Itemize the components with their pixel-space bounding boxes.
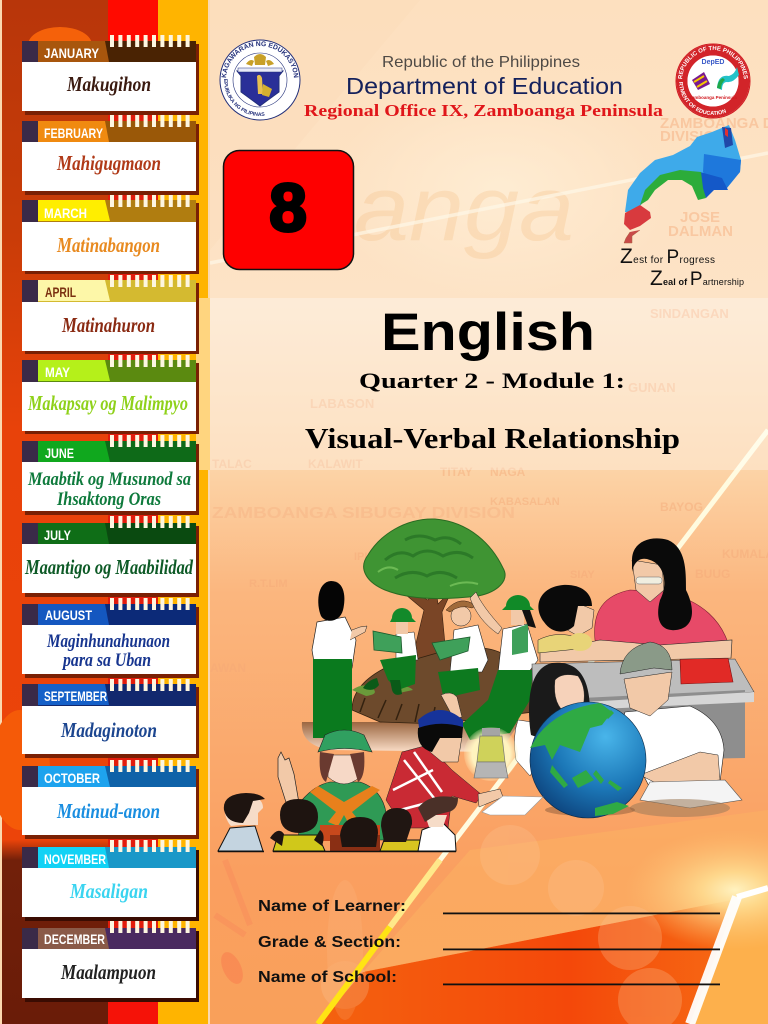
calendar card: April: Matinahuron <box>61 313 155 337</box>
slogan: Zeal of Partnership: Zeal of Partnership <box>650 267 744 290</box>
icon: regional seal: DepED <box>702 59 724 66</box>
calendar card: August <box>22 598 199 678</box>
heading: Regional Office: Regional Office IX, Zamboanga Peninsula <box>304 101 663 120</box>
subtitle: lesson title: Visual-Verbal Relationship <box>305 424 680 455</box>
calendar card: April: APRIL <box>45 284 76 300</box>
calendar card: September: Madaginoton <box>60 718 157 742</box>
faint map labels <box>210 115 768 675</box>
calendar card: August: para sa Uban <box>61 650 151 671</box>
grade badge: 8 <box>269 170 307 246</box>
calendar card: February: FEBRUARY <box>44 125 104 141</box>
diagonal streak <box>440 430 768 860</box>
faint decorative faces <box>321 825 682 1024</box>
scout girl <box>278 730 387 841</box>
calendar card: August: AUGUST <box>45 607 92 623</box>
calendar card: November: NOVEMBER <box>44 851 106 867</box>
faint map labels: SIAY <box>570 569 595 581</box>
calendar card: December <box>22 921 199 1002</box>
faint map labels: KALAWIT <box>308 457 363 471</box>
faint map labels: TITAY <box>440 465 473 479</box>
boy in red shirt <box>386 710 503 828</box>
calendar card: October: OCTOBER <box>44 770 100 786</box>
calendar sidebar background <box>0 0 210 1024</box>
faint map labels: SINDANGAN <box>650 306 729 321</box>
icon: regional seal: REPUBLIC OF THE PHILIPPINES <box>678 46 748 79</box>
faint map labels: IPIL <box>354 551 374 563</box>
grade badge <box>224 150 354 270</box>
faint map labels: BUUG <box>695 567 730 581</box>
calendar card: March: Matinabangon <box>56 233 160 257</box>
icon: DepEd seal: KAGAWARAN NG EDUKASYON <box>221 41 299 78</box>
calendar card: November: Masaligan <box>69 879 148 903</box>
illustration: students and teachers <box>218 519 754 852</box>
field: name of learner: Name of Learner: <box>258 898 406 915</box>
faint map labels: NAGA <box>490 465 526 479</box>
calendar card: December: DECEMBER <box>44 931 105 947</box>
paper <box>482 796 543 815</box>
faint map labels: LABASON <box>310 396 374 411</box>
faint map labels: AWAN <box>210 661 246 675</box>
faint map labels: DALMAN <box>668 223 733 240</box>
rock and ground <box>302 648 535 752</box>
calendar card: May: MAY <box>45 364 71 380</box>
calendar card: July: Maantigo og Maabilidad <box>24 555 193 579</box>
icon: DepEd seal <box>220 40 300 120</box>
teacher <box>540 538 732 662</box>
faint map labels: ZAMBOANGA SIBUGAY DIVISION <box>212 505 515 522</box>
desk <box>532 658 754 762</box>
calendar card: May <box>22 355 199 434</box>
boy at desk <box>538 585 594 653</box>
girl behind globe <box>514 663 590 776</box>
calendar card: March <box>22 195 199 274</box>
faint map labels: DIVISION <box>660 128 726 145</box>
faint map labels: GUNAN <box>628 380 676 395</box>
reading student green cap <box>363 608 418 695</box>
student arm raised <box>462 592 538 740</box>
calendar card: February <box>22 115 199 195</box>
map of Zamboanga Peninsula <box>624 125 741 243</box>
calendar card: May: Makapsay og Malimpyo <box>27 391 188 415</box>
calendar card: January: Makugihon <box>66 72 151 96</box>
calendar card: April <box>22 275 199 354</box>
front row of children <box>218 793 458 852</box>
calendar card: December: Maalampuon <box>60 960 156 984</box>
calendar card: January: JANUARY <box>44 45 100 61</box>
icon: regional seal <box>676 44 750 118</box>
field: name of school: Name of School: <box>258 969 397 986</box>
faint map labels: R.T.LIM <box>249 578 288 590</box>
calendar card: November <box>22 840 199 921</box>
faint map labels: BAYOG <box>660 500 703 514</box>
calendar card: June: Maabtik og Musunod sa <box>27 469 191 490</box>
reading student with hat <box>432 601 488 719</box>
faint map labels: TALAC <box>212 457 252 471</box>
calendar card: June: Ihsaktong Oras <box>56 489 161 510</box>
calendar card: October <box>22 760 199 839</box>
heading: Republic of the Philippines: Republic of the Philippines <box>382 54 580 71</box>
faint map labels: KABASALAN <box>490 496 560 508</box>
translucent title band <box>196 298 768 470</box>
calendar card: January <box>22 35 199 115</box>
faint map labels: JOSE <box>680 209 720 226</box>
calendar card: February: Mahigugmaon <box>56 151 161 175</box>
calendar card: July <box>22 516 199 597</box>
tree <box>364 519 505 660</box>
heading: Department of Education: Department of Education <box>346 73 623 99</box>
calendar card: July: JULY <box>44 527 72 543</box>
calendar card: March: MARCH <box>44 205 87 221</box>
calendar card: September <box>22 679 199 758</box>
icon: regional seal: Zamboanga Peninsula <box>689 95 737 100</box>
calendar card: August: Maginhunahunaon <box>46 631 170 652</box>
standing girl <box>312 581 367 738</box>
slogan: Zest for Progress: Zest for Progress <box>620 245 715 268</box>
wedge: red-orange lower area <box>318 899 737 1024</box>
subtitle: quarter and module: Quarter 2 - Module 1: <box>359 368 625 393</box>
calendar card: June <box>22 435 199 515</box>
title: English: English <box>381 303 595 362</box>
calendar card: June: JUNE <box>45 445 74 461</box>
lantern <box>464 727 518 781</box>
form: learner details <box>258 898 720 986</box>
field: grade and section: Grade & Section: <box>258 934 401 951</box>
faint map labels: anga <box>354 158 574 260</box>
background: right panel <box>196 0 768 1024</box>
light streak upper <box>210 153 768 263</box>
calendar card: September: SEPTEMBER <box>44 688 107 704</box>
globe <box>530 702 646 818</box>
calendar card: October: Matinud-anon <box>56 799 160 823</box>
boy with grey cap <box>620 642 742 817</box>
